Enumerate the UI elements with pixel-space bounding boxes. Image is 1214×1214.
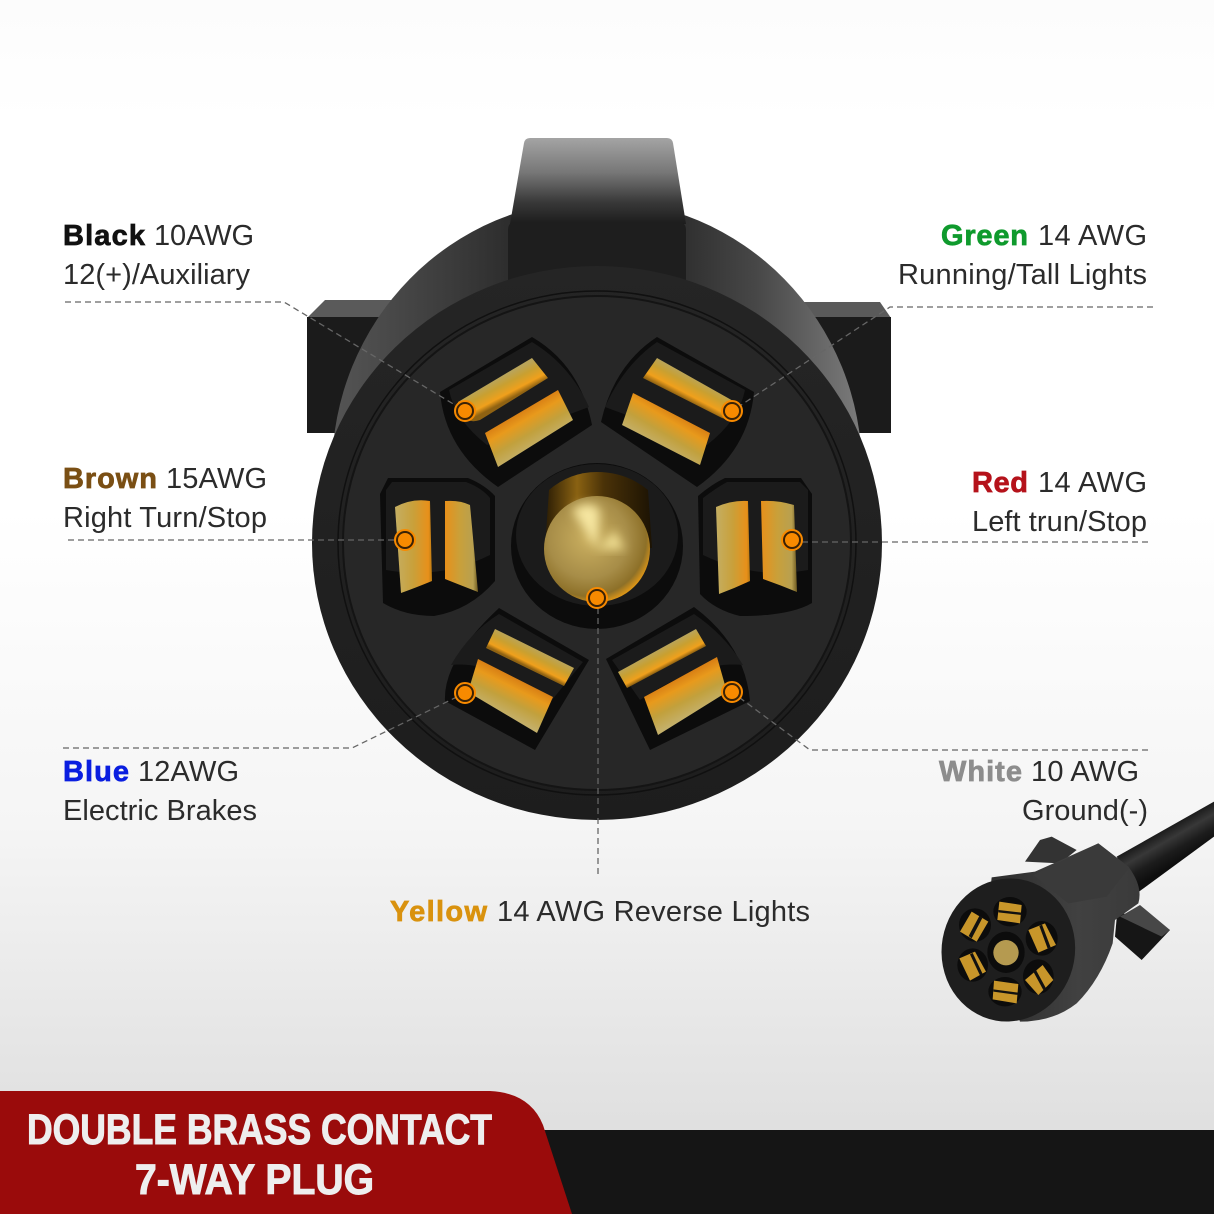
- label: red wire: Left trun/Stop: [972, 506, 1147, 538]
- label: blue wire: Electric Brakes: [63, 795, 257, 827]
- label: red wire: 14 AWG: [1038, 467, 1147, 499]
- label: black wire: Black: [63, 220, 146, 252]
- key block with marking: [1033, 843, 1129, 903]
- label: white wire: White: [939, 756, 1022, 788]
- title line one: DOUBLE BRASS CONTACT: [27, 1106, 492, 1154]
- center brass pin: [511, 463, 683, 629]
- label: blue wire: 12AWG: [138, 756, 239, 788]
- contact markers: [395, 401, 802, 703]
- label: brown wire: 15AWG: [166, 463, 267, 495]
- plug face: [312, 266, 882, 820]
- right tab: [1115, 905, 1170, 960]
- label: brown wire: [63, 463, 267, 534]
- title line two: 7-WAY PLUG: [135, 1156, 374, 1204]
- label: yellow wire: 14 AWG Reverse Lights: [497, 896, 810, 928]
- socket: left: [380, 478, 495, 616]
- small center pin: [987, 932, 1025, 973]
- label: green wire: [898, 220, 1147, 291]
- socket: right: [698, 478, 812, 616]
- label: black wire: 12(+)/Auxiliary: [63, 259, 250, 291]
- socket: lower right: [606, 607, 750, 750]
- left side tab: [307, 300, 400, 433]
- small plug body: [987, 843, 1140, 1022]
- small plug product view: [930, 802, 1214, 1032]
- socket: lower left: [445, 608, 589, 750]
- small plug face: [930, 868, 1086, 1032]
- label: black wire: 10AWG: [154, 220, 254, 252]
- top key block: [508, 222, 686, 282]
- label: yellow wire: Yellow: [390, 896, 487, 928]
- cable: [1117, 802, 1214, 893]
- label: white wire: Ground(-): [1022, 795, 1148, 827]
- label: green wire: Green: [941, 220, 1028, 252]
- label: blue wire: [63, 756, 257, 827]
- label: white wire: 10 AWG: [1031, 756, 1139, 788]
- main plug illustration: [307, 138, 891, 820]
- label: brown wire: Brown: [63, 463, 157, 495]
- label: red wire: Red: [972, 467, 1028, 499]
- label: black wire: [63, 220, 254, 291]
- socket: upper right: [601, 337, 754, 487]
- bottom black bar: [540, 1130, 1214, 1214]
- small sockets: [957, 897, 1058, 1006]
- label: blue wire: Blue: [63, 756, 129, 788]
- red title banner: [0, 1091, 572, 1214]
- leader lines: [63, 302, 1153, 878]
- label: brown wire: Right Turn/Stop: [63, 502, 267, 534]
- top latch tab: [510, 138, 686, 224]
- socket: upper left: [440, 337, 592, 487]
- right side tab: [800, 302, 891, 433]
- plug body: [332, 200, 862, 740]
- label: green wire: Running/Tall Lights: [898, 259, 1147, 291]
- label: green wire: 14 AWG: [1038, 220, 1147, 252]
- label: white wire: [939, 756, 1148, 827]
- upper tab: [1025, 837, 1077, 863]
- label: red wire: [972, 467, 1147, 538]
